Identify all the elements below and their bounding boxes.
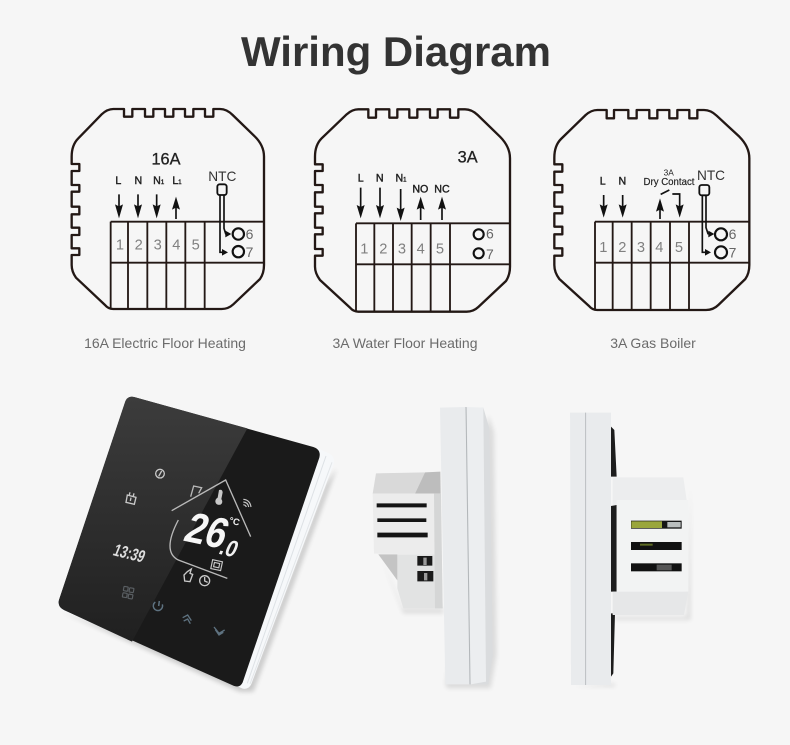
diagram outline: [315, 109, 510, 312]
product: thermostat side view right: [570, 413, 691, 687]
terminal numbers: [599, 240, 683, 256]
thermometer icon: [215, 490, 223, 505]
wifi icon: [243, 499, 251, 507]
panel: 3A gas boiler wiring diagram: [554, 110, 749, 310]
wire labels: L: [358, 172, 364, 184]
product: thermostat side view left: [373, 407, 497, 688]
terminal grid: [111, 222, 264, 309]
bottom vent slot: [631, 563, 682, 571]
caption: water: 3A Water Floor Heating: [332, 335, 478, 351]
wire arrows: [357, 188, 446, 221]
wire labels: L: [115, 175, 121, 187]
wire labels: NC: [434, 184, 450, 196]
wire labels: L1: [172, 175, 182, 187]
black glass face: [59, 397, 320, 686]
sensor terminals 6 and 7: 7: [729, 244, 737, 260]
terminal numbers: 1: [599, 240, 607, 256]
down button: [214, 627, 225, 635]
vent slots: [377, 503, 428, 537]
terminal numbers: 2: [135, 237, 143, 253]
sensor terminals 6 and 7: 6: [729, 226, 737, 242]
drop shadow: [573, 483, 691, 687]
white body edge: [57, 448, 334, 689]
title: Wiring Diagram: [241, 28, 551, 75]
sensor terminals 6 and 7: [233, 226, 254, 260]
housing top: [613, 477, 687, 505]
clock time: 13:39: [110, 540, 149, 566]
wire labels: [600, 175, 626, 187]
sensor terminals 6 and 7: 6: [486, 226, 494, 242]
NTC sensor: NTC: [208, 169, 236, 184]
housing body: [617, 500, 688, 592]
terminal numbers: [360, 241, 444, 257]
wire labels: L: [600, 175, 606, 187]
floor heating icon: [211, 560, 222, 571]
wire labels: NO: [412, 184, 428, 196]
terminal grid: [595, 222, 749, 309]
housing vent band: [373, 494, 441, 554]
power button: [153, 601, 163, 611]
caption: gas: 3A Gas Boiler: [610, 335, 696, 351]
wire labels: [358, 172, 450, 196]
product: thermostat front view: [57, 397, 337, 692]
manual mode hand icon: [184, 569, 193, 582]
sensor terminals 6 and 7: [474, 226, 494, 262]
sensor terminals 6 and 7: 6: [246, 226, 254, 242]
wire arrows: [115, 194, 180, 219]
wire labels: [115, 175, 182, 187]
back housing: [613, 477, 688, 615]
boiler icon: [126, 492, 136, 504]
terminal numbers: 3: [637, 240, 645, 256]
diagram outline: [72, 109, 264, 309]
front plate: [570, 413, 611, 685]
diagram outline: [554, 110, 749, 310]
rating label: 3A: [458, 148, 478, 166]
degree unit: °C: [228, 515, 241, 528]
wire labels: N: [618, 175, 626, 187]
front plate: [440, 407, 470, 684]
help icon: [156, 469, 164, 478]
house outline on display: [170, 480, 251, 578]
panel: 16A wiring diagram: [72, 109, 264, 309]
up button: [183, 615, 191, 624]
sensor terminals 6 and 7: 7: [246, 244, 254, 260]
drop shadow: [60, 468, 337, 692]
terminal numbers: 1: [116, 237, 124, 253]
housing top faces: [373, 472, 425, 494]
terminal numbers: 4: [172, 237, 180, 253]
housing bottom: [613, 592, 688, 615]
dark rear edge: [611, 427, 617, 677]
rating label: 16A: [151, 151, 181, 169]
terminal numbers: 2: [618, 240, 626, 256]
terminal numbers: [116, 237, 200, 253]
top vent slot: [631, 521, 682, 529]
terminal numbers: 5: [192, 237, 200, 253]
terminal numbers: 4: [655, 240, 663, 256]
terminal numbers: 1: [360, 241, 368, 257]
screw terminals: [417, 556, 433, 581]
schedule clock icon: [200, 576, 210, 586]
terminal numbers: 4: [417, 241, 425, 257]
dry contact label: 3A: [664, 167, 674, 177]
wire labels: N1: [395, 172, 407, 184]
sensor terminals 6 and 7: [715, 226, 737, 260]
sensor terminals 6 and 7: 7: [486, 246, 494, 262]
housing lower faces: [397, 554, 443, 608]
wire labels: N: [134, 175, 142, 187]
wire arrows and contact switch: [600, 190, 684, 219]
terminal numbers: 5: [436, 241, 444, 257]
caption: 16A: 16A Electric Floor Heating: [84, 335, 246, 351]
terminal numbers: 3: [154, 237, 162, 253]
gloss reflection: [59, 397, 247, 642]
dry contact label: [644, 167, 695, 188]
wire labels: N1: [153, 175, 165, 187]
terminal numbers: 5: [675, 240, 683, 256]
decimal reading: .0: [216, 534, 243, 562]
panel: 3A water floor wiring diagram: [315, 109, 510, 312]
back housing: [373, 472, 443, 608]
NTC sensor: [697, 168, 725, 256]
temperature reading: 26: [178, 505, 235, 558]
terminal grid: [356, 223, 509, 312]
NTC sensor: [208, 169, 236, 256]
terminal numbers: 3: [398, 241, 406, 257]
NTC sensor: NTC: [697, 168, 725, 183]
wire labels: N: [376, 172, 384, 184]
middle vent slot: [631, 542, 682, 550]
menu icon: [122, 586, 134, 599]
terminal numbers: 2: [379, 241, 387, 257]
drop shadow: [380, 415, 497, 688]
dry contact label: Dry Contact: [644, 177, 695, 188]
plate side face: [466, 408, 493, 684]
